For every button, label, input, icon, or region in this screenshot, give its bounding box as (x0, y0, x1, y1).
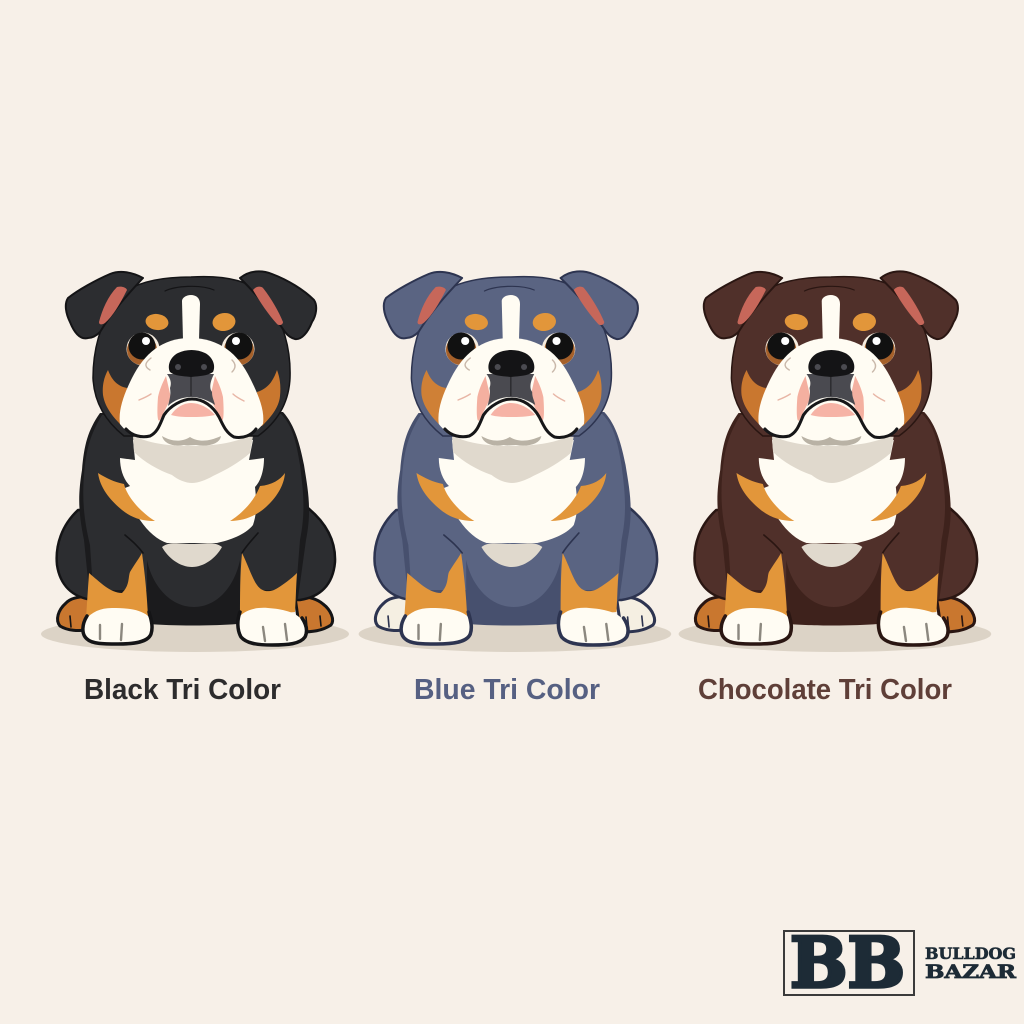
dog: black tri color (41, 271, 349, 652)
back feet (375, 597, 655, 632)
white chest with tan markings (98, 436, 285, 567)
head (411, 277, 611, 436)
back feet (58, 597, 333, 632)
dog: chocolate tri color (679, 271, 991, 652)
logo box (784, 931, 914, 995)
ears (66, 271, 316, 339)
white chest with tan markings (736, 436, 926, 567)
head (93, 277, 290, 436)
eyes (765, 332, 895, 366)
muzzle (758, 338, 904, 446)
ears (384, 271, 638, 339)
logo monogram: BB (790, 923, 905, 1004)
front legs and paws (83, 553, 306, 645)
logo wordmark bottom: BAZAR (925, 961, 1016, 983)
front legs and paws (401, 553, 628, 645)
front legs and paws (721, 553, 948, 645)
label: black tri color: Black Tri Color (84, 674, 281, 706)
ground shadow (41, 616, 349, 652)
back feet (695, 597, 975, 632)
body (57, 412, 335, 626)
body (695, 412, 977, 626)
eyes (126, 332, 254, 366)
eyes (445, 332, 575, 366)
body (375, 412, 657, 626)
logo wordmark top: BULLDOG (925, 944, 1016, 963)
head (731, 277, 931, 436)
label: blue tri color: Blue Tri Color (414, 674, 600, 706)
logo: bulldog bazar (784, 923, 1016, 1004)
label: chocolate tri color: Chocolate Tri Color (698, 674, 952, 706)
white chest with tan markings (416, 436, 606, 567)
ground shadow (359, 616, 671, 652)
muzzle (438, 338, 584, 446)
ground shadow (679, 616, 991, 652)
ears (704, 271, 958, 339)
dog: blue tri color (359, 271, 671, 652)
muzzle (120, 338, 263, 446)
